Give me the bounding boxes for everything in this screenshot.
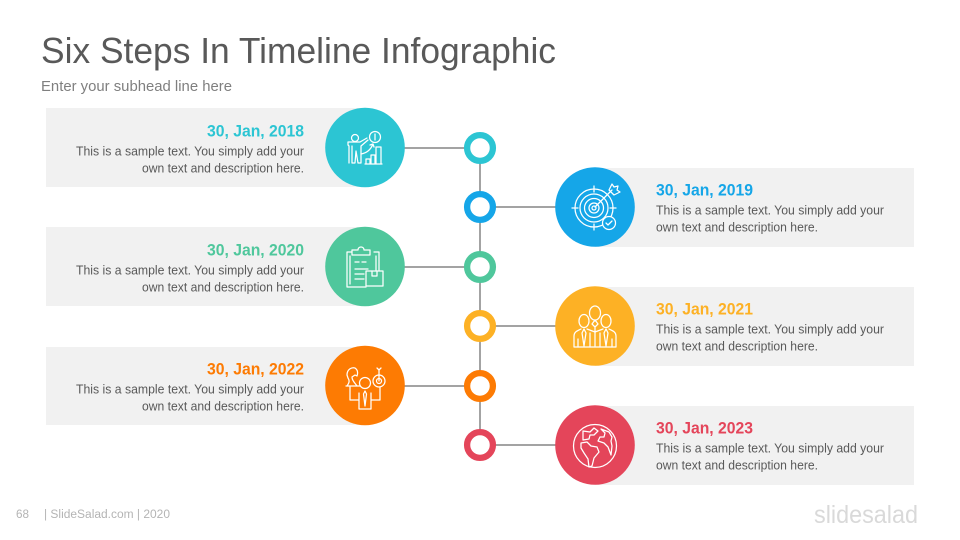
step 4 panel: 2021: own text and description here. [656,340,818,354]
step 4 panel: 2021: This is a sample text. You simply add your [656,322,884,336]
step 3 panel: 2020: This is a sample text. You simply add your [76,264,304,278]
step 3 panel: 2020: 30, Jan, 2020 [207,242,304,260]
subtitle: Enter your subhead line here [41,78,232,95]
icon: globe [574,424,616,468]
icon: target with arrow [572,184,620,230]
step 4 panel: 2021: 30, Jan, 2021 [656,300,753,318]
step 1 panel: 2018: own text and description here. [142,162,304,176]
step 5 panel: 2022 [46,346,493,425]
step 6 panel: 2023: own text and description here. [656,458,818,472]
step 6 panel: 2023: 30, Jan, 2023 [656,420,753,438]
step 2 panel: 2019 [467,167,914,247]
step 5 panel: 2022: 30, Jan, 2022 [207,360,304,378]
step 4 panel: 2021 [467,286,914,366]
step 2 panel: 2019: This is a sample text. You simply add your [656,204,884,218]
footer: page number and site: 68 [16,509,29,521]
step 1 panel: 2018 [46,108,493,187]
step 6 panel: 2023 [467,405,914,485]
step 3 panel: 2020: own text and description here. [142,280,304,294]
icon: clipboard with box [347,247,383,287]
step 2 panel: 2019: own text and description here. [656,220,818,234]
step 2 panel: 2019: 30, Jan, 2019 [656,182,753,200]
icon: team of three people [574,306,616,347]
footer: page number and site: | SlideSalad.com | 2020 [44,509,170,521]
logo: slidesalad wordmark: slidesalad [814,501,918,529]
step 5 panel: 2022: own text and description here. [142,400,304,414]
timeline spine [365,148,595,445]
icon: presenter with growth chart [348,132,382,164]
title: Six Steps In Timeline Infographic [41,30,556,71]
step 3 panel: 2020 [46,227,493,306]
step 1 panel: 2018: This is a sample text. You simply add your [76,144,304,158]
step 1 panel: 2018: 30, Jan, 2018 [207,122,304,140]
icon: person with chess knight and target [346,368,385,409]
step 5 panel: 2022: This is a sample text. You simply add your [76,382,304,396]
step 6 panel: 2023: This is a sample text. You simply add your [656,442,884,456]
